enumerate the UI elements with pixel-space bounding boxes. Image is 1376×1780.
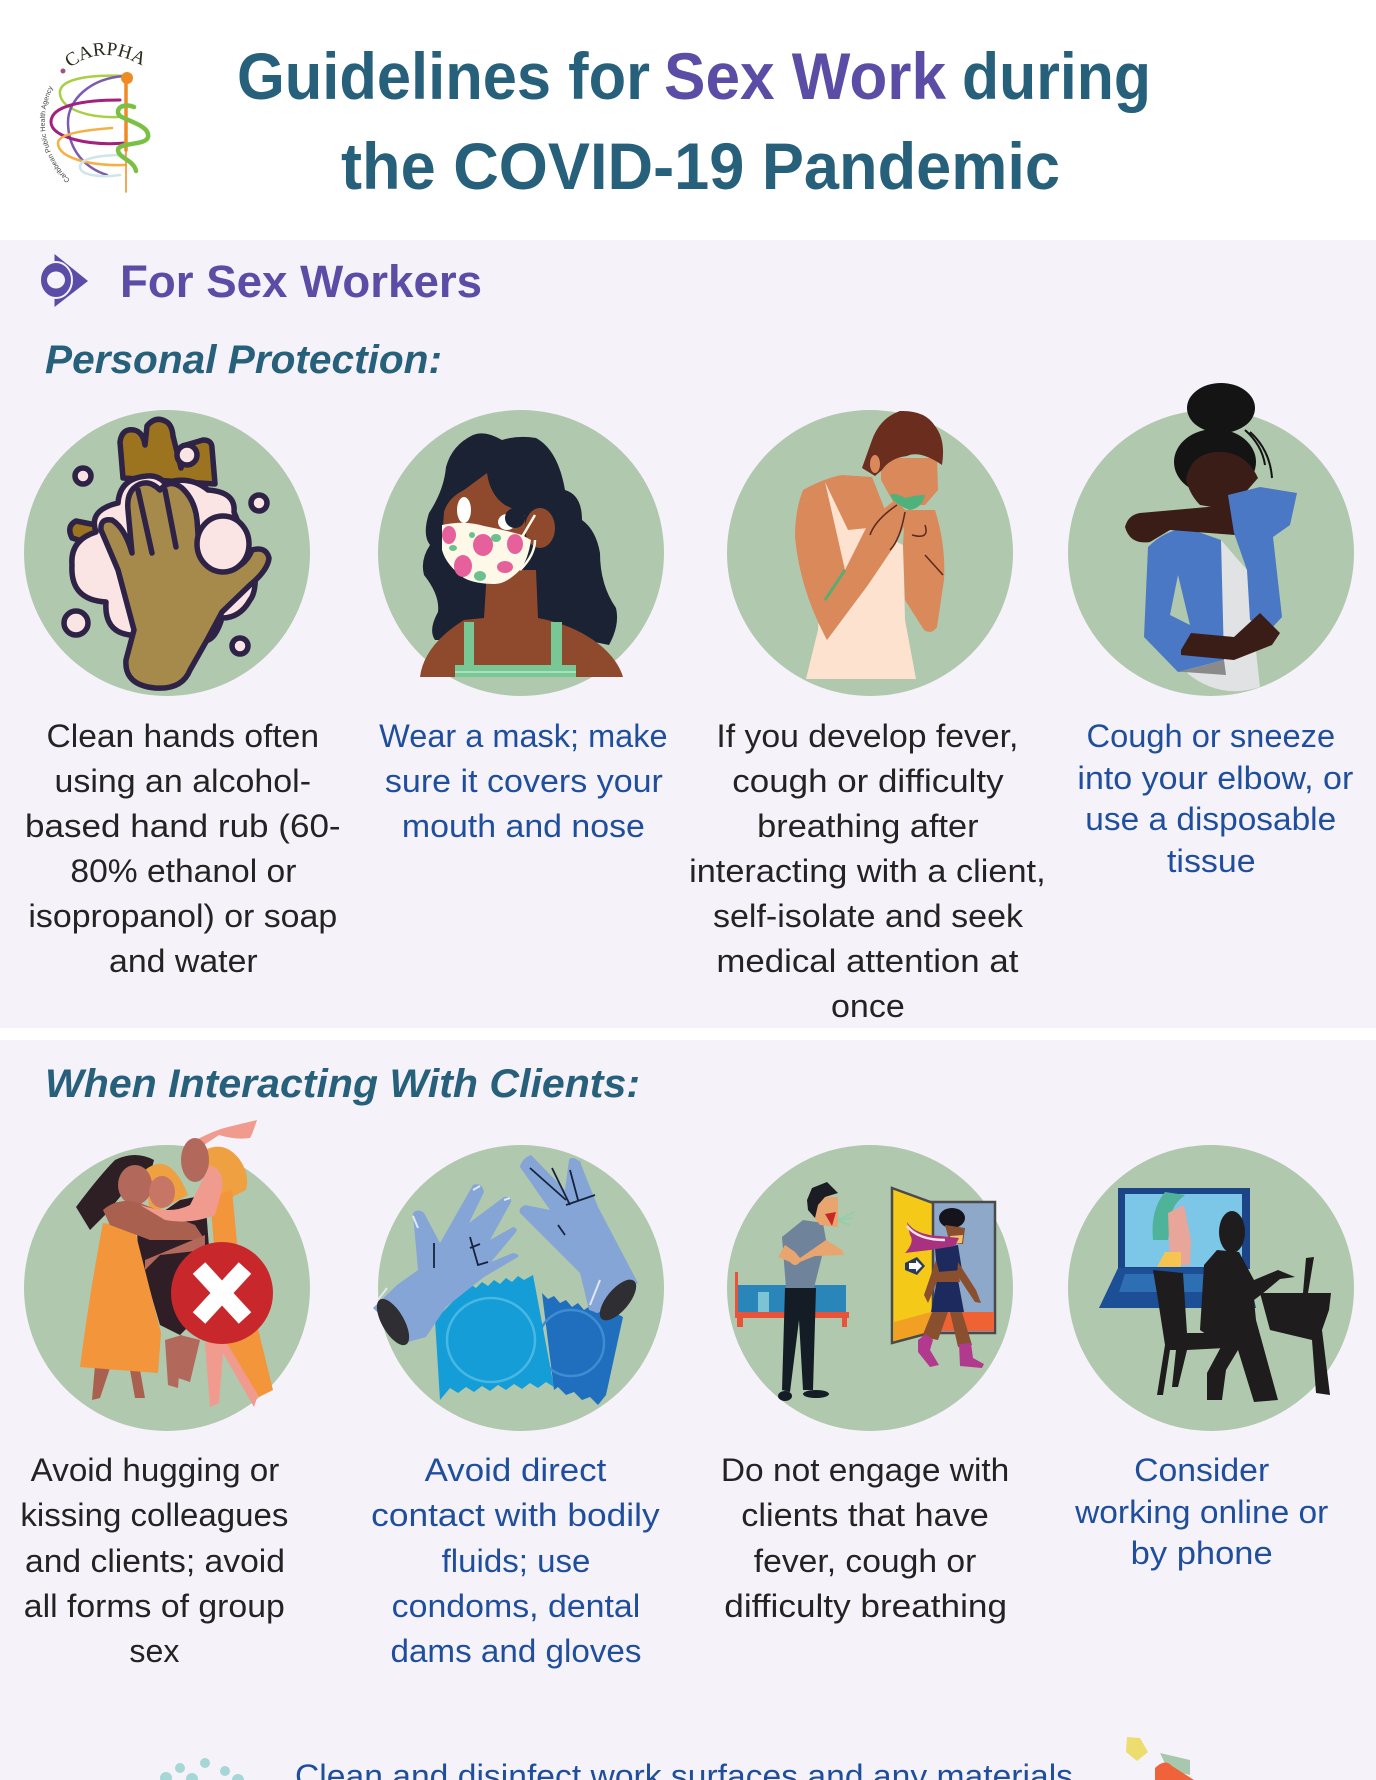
title: Guidelines for [237,39,650,113]
icon: no hugging [24,1120,310,1431]
text: consider working online [1074,1452,1329,1571]
text: avoid hugging: all forms of group [24,1588,285,1624]
text: cough or sneeze [1077,718,1354,879]
text: self-isolate: If you develop fever, [716,718,1018,754]
text: avoid hugging: sex [129,1633,179,1669]
logo: CARPHA: Caribbean Public Health Agency [40,86,69,182]
icon: soap bubbles [160,1758,244,1780]
text: self-isolate: interacting with a client, [689,853,1046,889]
icon: person coughing with tissue [727,410,1013,696]
header [40,39,1151,203]
text: avoid direct contact: condoms, dental [392,1588,640,1624]
text: self-isolate: breathing after [757,808,979,844]
text: cough or sneeze: into your elbow, or [1077,760,1354,796]
logo: CARPHA [40,42,150,193]
woman leaving [905,1208,984,1368]
text: do not engage: clients that have [741,1497,989,1533]
icon: section marker [40,254,88,307]
text: self-isolate: self-isolate and seek [713,898,1024,934]
title: the COVID-19 Pandemic [341,129,1060,203]
text: consider working online: by phone [1131,1535,1273,1571]
text: clean hands: 80% ethanol or [70,853,297,889]
text: avoid direct contact: contact with bodily [371,1497,660,1533]
heading: for sex workers: For Sex Workers [120,256,482,307]
panel: personal protection [0,240,1376,1028]
text: avoid hugging [20,1452,288,1669]
icon: washing hands [24,410,310,696]
text: avoid hugging: kissing colleagues [20,1497,288,1533]
icon: red cross [171,1242,273,1344]
title: Sex Work [664,39,946,113]
text: cough or sneeze: Cough or sneeze [1086,718,1335,754]
text: avoid direct contact: dams and gloves [390,1633,642,1669]
text: self-isolate: cough or difficulty [732,763,1004,799]
laptop [1099,1188,1256,1308]
icon: coughing man and exit door [727,1145,1013,1431]
text: clean hands: Clean hands often [46,718,319,754]
text: wear a mask: Wear a mask; make [379,718,668,754]
text: self-isolate [689,718,1046,1024]
man [778,1182,855,1401]
text: consider working online: working online or [1074,1494,1329,1530]
text: avoid direct contact: fluids; use [442,1543,590,1579]
text: do not engage: fever, cough or [754,1543,977,1579]
text: clean hands: using an alcohol- [54,763,311,799]
text: cough or sneeze: use a disposable [1085,801,1336,837]
text: self-isolate: medical attention at [716,943,1019,979]
door [892,1188,995,1343]
heading: personal protection: Personal Protection: [45,338,442,382]
text: avoid direct contact [371,1452,660,1669]
title: during [962,39,1151,113]
text: cough or sneeze: tissue [1167,843,1256,879]
icon: woman wearing mask [378,410,664,696]
text: avoid hugging: and clients; avoid [25,1543,285,1579]
icon: working online [1068,1145,1354,1431]
text: clean hands: isopropanol) or soap [28,898,337,934]
panel: when interacting with clients [0,1040,1376,1780]
logo: CARPHA: CARPHA [66,42,142,66]
text: wear a mask: sure it covers your [385,763,663,799]
text: clean hands: and water [109,943,258,979]
text: avoid direct contact: Avoid direct [425,1452,606,1488]
text: do not engage: difficulty breathing [724,1588,1007,1624]
icon: spray bottle [1126,1737,1194,1780]
text: self-isolate: once [831,988,905,1024]
icon: coughing into elbow [1068,383,1354,696]
heading: when interacting with clients: When Interacting With Clients: [45,1062,640,1106]
text: wear a mask [379,718,668,844]
text: wear a mask: mouth and nose [402,808,645,844]
text: do not engage [721,1452,1009,1624]
title [237,39,1151,203]
text: consider working online: Consider [1134,1452,1270,1488]
silhouette at desk [1153,1211,1331,1402]
icon: gloves and condoms [370,1145,664,1431]
text: do not engage: Do not engage with [721,1452,1009,1488]
text: clean hands: based hand rub (60- [25,808,341,844]
bed [735,1272,849,1327]
text: clean hands [25,718,341,979]
text: avoid hugging: Avoid hugging or [31,1452,280,1488]
